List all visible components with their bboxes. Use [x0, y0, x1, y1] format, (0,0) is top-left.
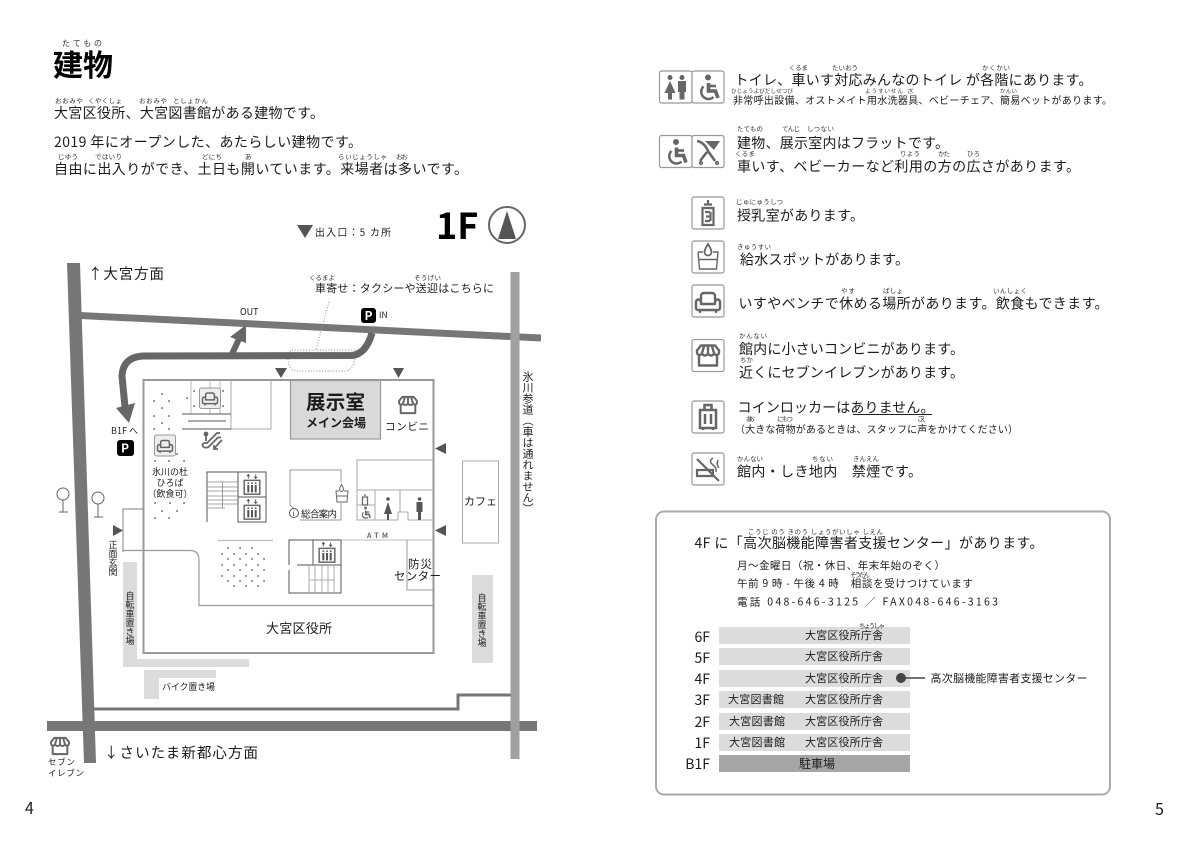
intro text: としょかん — [173, 95, 208, 105]
convenience store — [385, 397, 429, 434]
floor chart: 3F — [694, 690, 710, 710]
floor chart: 大宮区役所庁舎 — [805, 670, 883, 686]
main entrance: 正面玄関 — [106, 540, 120, 577]
south stairs and elevator — [289, 540, 341, 593]
page 4 heading: たてもの — [62, 38, 102, 49]
car drop-off note: くるまよ — [309, 272, 335, 282]
bike parking — [144, 670, 216, 699]
bicycle parking west: 自転車置き場 — [124, 590, 136, 646]
panel: support center — [656, 512, 1110, 794]
ATM label: ATM — [366, 531, 388, 541]
icon: sofa terrace — [200, 388, 220, 408]
row: convenience store: 近くにセブンイレブンがあります。 — [739, 362, 964, 382]
row: flat access: しつない — [807, 123, 834, 133]
row: seating: ばしょ — [883, 285, 903, 295]
row: seating: やす — [841, 285, 856, 295]
seven eleven — [48, 738, 84, 779]
opening hours and contact — [737, 558, 998, 610]
row: toilets: トイレ、車いす対応みんなのトイレ が各階にあります。 — [734, 70, 1092, 90]
B1F parking: B1F へ — [111, 424, 138, 437]
icon: woman on map — [384, 497, 392, 520]
row: nursing room: 授乳室があります。 — [737, 206, 864, 226]
parking entrance — [361, 307, 388, 324]
row: no smoking: かんない — [737, 453, 763, 463]
page number 4: 4 — [25, 795, 34, 819]
road label: 氷川参道（車は通れません） — [520, 371, 536, 514]
floor chart: 6F — [694, 627, 710, 647]
row: coin lockers: にもつ — [777, 413, 793, 423]
icon: wheelchair on map — [362, 507, 370, 518]
row: flat access: りよう — [900, 148, 920, 158]
seven eleven: イレブン — [48, 767, 84, 779]
row: seating: いすやベンチで休める場所があります。飲食もできます。 — [738, 294, 1108, 314]
entrance markers — [275, 368, 446, 536]
ward office label: 大宮区役所 — [266, 618, 332, 637]
building outline — [123, 380, 434, 653]
page 4 heading: 建物 — [53, 41, 113, 85]
floor chart: 大宮図書館 — [729, 713, 785, 729]
floor chart: 大宮区役所庁舎 — [805, 648, 883, 664]
row: flat access: ひろ — [967, 148, 980, 158]
floor chart: 1F — [694, 733, 710, 753]
support center heading: 4F に「高次脳機能障害者支援センター」があります。 — [694, 533, 1044, 553]
floor chart: 大宮図書館 — [729, 734, 785, 750]
car drop-off note: 車寄せ：タクシーや送迎はこちらに — [315, 280, 494, 296]
row: convenience store: かんない — [739, 330, 767, 340]
row: flat access — [660, 123, 1080, 176]
intro text: くやくしょ — [88, 95, 122, 105]
plaza label: （飲食可） — [147, 487, 193, 500]
row: toilets: ようすいせん — [865, 87, 903, 95]
row: convenience store: ちか — [740, 354, 754, 364]
row: no smoking: きんえん — [853, 453, 880, 463]
opening hours and contact: 月〜金曜日（祝・休日、年末年始のぞく） — [737, 558, 945, 573]
floor chart: 5F — [694, 648, 710, 668]
row: toilets — [660, 62, 1112, 107]
intro text: おおみや — [139, 95, 167, 105]
row: seating: いんしょく — [993, 285, 1027, 295]
exhibition room: メイン会場 — [306, 414, 366, 431]
row: flat access: 車いす、ベビーカーなど利用の方の広さがあります。 — [737, 156, 1080, 176]
row: water spot: 給水スポットがあります。 — [740, 250, 909, 270]
car drop-off note: そうげい — [414, 272, 441, 282]
4F callout: 高次脳機能障害者支援センター — [930, 670, 1088, 686]
row: coin lockers: おお — [746, 413, 756, 423]
cafe: カフェ — [464, 493, 497, 509]
opening hours and contact: そうだん — [850, 569, 870, 579]
vehicle route arrows — [116, 325, 372, 423]
row: nursing room: じゅにゅうしつ — [736, 196, 783, 206]
page number 5: 5 — [1155, 796, 1164, 820]
row: no smoking — [692, 453, 922, 485]
icon: water spot on map — [336, 484, 348, 502]
icon: man on map — [416, 497, 422, 520]
intro text: じゆう — [58, 151, 78, 161]
row: toilets: くるま — [789, 62, 808, 72]
row: coin lockers: コインロッカーはありません。 — [738, 398, 934, 418]
floor chart: 大宮区役所庁舎 — [805, 734, 883, 750]
floor chart — [685, 620, 910, 774]
convenience store: コンビニ — [385, 419, 429, 434]
row: flat access: くるま — [735, 148, 755, 158]
row: flat access: かた — [938, 148, 950, 158]
plaza label: 氷川の杜 — [152, 465, 188, 478]
plaza label — [147, 465, 193, 500]
west stairs and elevators — [207, 472, 266, 522]
row: coin lockers — [692, 398, 1018, 436]
disaster prevention center — [394, 540, 441, 590]
row: water spot: きゅうすい — [737, 241, 771, 251]
direction label south: ↓さいたま新都心方面 — [104, 742, 258, 763]
row: no smoking: ちない — [812, 453, 833, 463]
opening hours and contact: 電話 048-646-3125 ／ FAX048-646-3163 — [737, 594, 998, 610]
row: flat access: 建物、展示室内はフラットです。 — [737, 133, 949, 153]
plaza label: ひろば — [156, 476, 184, 489]
B1F parking: P — [121, 440, 129, 456]
intro text: 2019 年にオープンした、あたらしい建物です。 — [54, 132, 362, 152]
row: flat access: たてもの — [737, 123, 763, 133]
floor chart: 大宮区役所庁舎 — [805, 713, 883, 729]
floor chart: 大宮図書館 — [728, 691, 784, 707]
icon: nursing room on map — [362, 494, 368, 505]
row: toilets: たいおう — [832, 62, 858, 72]
disaster prevention center: センター — [394, 568, 441, 584]
floor chart: 大宮区役所庁舎 — [805, 691, 883, 707]
courtyard dots — [222, 548, 264, 586]
map roads — [47, 263, 541, 763]
information desk: 総合案内 — [301, 506, 337, 520]
exhibition room: 展示室 — [306, 386, 365, 415]
row: toilets: 非常呼出設備、オストメイト用水洗器具、ベビーチェア、簡易ベットがあります。 — [733, 92, 1112, 107]
floor chart: 2F — [694, 712, 710, 732]
parking entrance: P — [364, 307, 373, 324]
row: convenience store: 館内に小さいコンビニがあります。 — [739, 339, 964, 359]
intro text: らいじょうしゃ — [338, 151, 387, 161]
floor label 1F: 1F — [436, 198, 478, 250]
row: toilets: さく — [907, 87, 915, 95]
parking entrance: IN — [379, 309, 388, 321]
row: toilets: かくかい — [982, 62, 1010, 72]
exhibition room — [290, 380, 380, 439]
disaster prevention center: 防災 — [408, 556, 432, 572]
OUT label: OUT — [240, 305, 259, 318]
row: convenience store — [692, 330, 964, 382]
intro text: どにち — [202, 151, 222, 161]
floor chart: 大宮区役所庁舎 — [805, 627, 883, 643]
east service rooms — [357, 460, 433, 520]
row: nursing room — [692, 196, 864, 229]
floor chart: 4F — [694, 669, 710, 689]
B1F parking — [111, 424, 138, 456]
intro text — [54, 95, 468, 179]
cafe — [462, 461, 498, 543]
intro text: おお — [396, 151, 408, 161]
floor chart: 駐車場 — [799, 755, 835, 772]
row: water spot — [692, 241, 909, 273]
intro text: ではいり — [95, 151, 122, 161]
north compass — [489, 207, 525, 243]
trees — [57, 488, 104, 517]
icon: escalator — [202, 432, 222, 449]
car drop-off note — [288, 272, 494, 371]
icon: sofa plaza — [154, 435, 176, 456]
row: coin lockers: こえ — [917, 413, 926, 423]
seven eleven: セブン — [48, 756, 75, 768]
opening hours and contact: 午前 9 時 - 午後 4 時 相談を受けつけています — [737, 576, 973, 591]
intro text: 自由に出入りができ、土日も開いています。来場者は多いです。 — [54, 159, 468, 179]
intro text: おおみや — [55, 95, 83, 105]
entrance legend: 出入口：5 カ所 — [315, 224, 391, 239]
intro text: あ — [245, 151, 252, 161]
direction label north: ↑大宮方面 — [88, 263, 164, 284]
north terrace and stairs — [182, 380, 271, 429]
support center heading: こうじ のう きのう しょうがいしゃ しえん — [748, 526, 884, 536]
bicycle parking east: 自転車置き場 — [476, 592, 488, 648]
row: toilets: かんい — [1000, 87, 1017, 95]
information desk — [290, 470, 341, 520]
information desk: i — [293, 509, 295, 519]
floor chart: ちょうしゃ — [859, 620, 885, 630]
intro text: 大宮区役所、大宮図書館がある建物です。 — [54, 103, 324, 123]
floor chart: B1F — [685, 754, 710, 774]
bicycle parking west — [123, 562, 249, 667]
bike parking: バイク置き場 — [162, 680, 215, 693]
row: no smoking: 館内・しき地内 禁煙です。 — [737, 462, 922, 482]
bicycle parking east — [472, 575, 493, 663]
row: flat access: てんじ — [782, 123, 800, 133]
plaza dots — [154, 391, 223, 518]
row: toilets: ひじょうよびだしせつび — [731, 87, 793, 95]
main entrance — [106, 525, 123, 577]
row: coin lockers: （大きな荷物があるときは、スタッフに声をかけてください） — [735, 421, 1018, 436]
row: seating — [692, 285, 1108, 317]
